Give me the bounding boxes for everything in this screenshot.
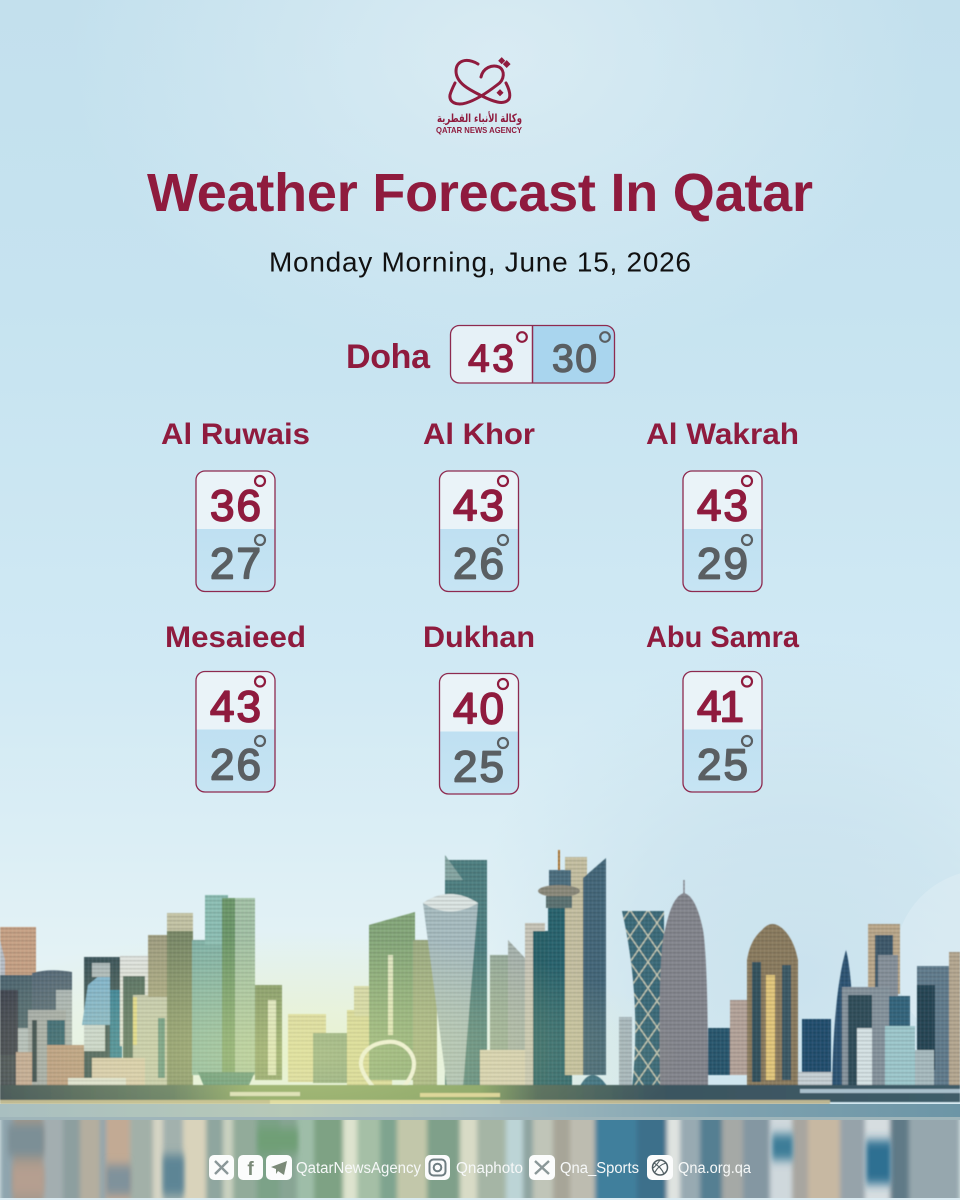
panel: Al Wakrah: Al Wakrah [646,418,799,451]
title: Weather Forecast In Qatar [147,163,813,223]
panel: Abu Samra [646,621,799,792]
panel: Abu Samra: Abu Samra [646,621,799,654]
icon: Telegram [266,1155,292,1180]
Doha skyline [0,850,960,1105]
water and reflection [0,1104,960,1200]
icon: Facebook [238,1155,263,1180]
waterfront [0,1085,960,1104]
icon: Facebook: f [247,1159,254,1180]
icon: website [647,1155,673,1180]
high temperature: 43 [468,338,514,380]
panel: Al Ruwais: 27 [210,540,261,588]
panel: Al Ruwais: 36 [210,482,261,530]
panel: Mesaieed: 43 [210,682,261,732]
panel: Abu Samra: 41 [697,682,744,732]
panel: Dukhan: Dukhan [423,621,535,654]
date line: Monday Morning, June 15, 2026 [269,246,691,278]
panel: Al Khor [423,418,535,592]
panel: Al Khor: Al Khor [423,418,535,451]
logo Arabic name: وكالة الأنباء القطرية [437,111,522,126]
logo mark: squares [496,57,511,96]
panel: Al Wakrah: 43 [697,482,748,530]
handle: Qnaphoto: Qnaphoto [456,1160,523,1177]
warm haze over the west towers [0,880,700,1105]
icon: Instagram [425,1155,450,1180]
panel: Al Wakrah: 29 [697,540,748,588]
panel: Doha [346,326,614,383]
arch sculpture [361,1042,414,1092]
logo: Qatar News Agency [436,57,522,135]
bottom edge [0,1198,960,1200]
icon: X sports [529,1155,555,1180]
panel: Mesaieed: 26 [210,740,261,790]
panel: Dukhan: 25 [453,742,504,792]
panel: Al Khor: 26 [453,540,504,588]
panel: Dukhan: 40 [453,684,504,734]
handle: website: Qna.org.qa [678,1160,751,1177]
panel: Mesaieed [165,621,306,792]
panel: Mesaieed: Mesaieed [165,621,306,654]
handle: Qna_Sports: Qna_Sports [560,1160,639,1177]
reflection stripes [0,1120,960,1198]
Doha temperature box [450,326,614,383]
label: Doha: Doha [346,338,431,376]
panel: Abu Samra: 25 [697,740,748,790]
logo mark: orbits [450,60,510,104]
handle: QatarNewsAgency: QatarNewsAgency [296,1160,421,1177]
panel: Al Khor: 43 [453,482,504,530]
panel: Dukhan [423,621,535,794]
social media footer [209,1155,751,1180]
panel: Al Ruwais [161,418,310,592]
panel: Al Wakrah [646,418,799,592]
open water band [0,1104,960,1120]
logo English name: QATAR NEWS AGENCY [436,125,522,135]
panel: Al Ruwais: Al Ruwais [161,418,310,451]
icon: X [209,1155,234,1180]
low temperature: 30 [552,338,597,380]
